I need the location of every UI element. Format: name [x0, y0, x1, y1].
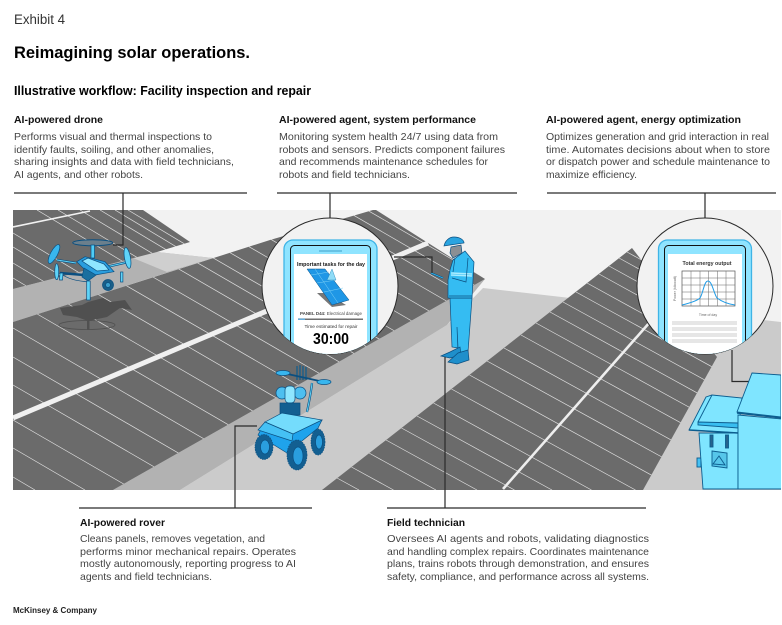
line chart: energy output: Power (kilowatt) [673, 276, 677, 301]
text block: system performance agent: AI-powered agent, system performance [279, 115, 476, 126]
zoom callout: energy output tablet [637, 218, 773, 358]
text block: AI-powered rover: AI-powered rover [80, 518, 165, 529]
illustration: drone [46, 240, 132, 300]
solar panel image [317, 293, 346, 307]
subtitle: Illustrative workflow: Facility inspection and repair [14, 84, 311, 98]
text block: AI-powered rover: performs minor mechanical repairs. Operates [80, 547, 296, 558]
text block: AI-powered rover: Cleans panels, removes vegetation, and [80, 534, 265, 545]
zoom callout: energy output tablet: Total energy output [682, 261, 732, 267]
text block: energy optimization agent: Optimizes generation and grid interaction in real [546, 132, 769, 143]
zoom callout: task tablet: Important tasks for the day [297, 262, 366, 268]
zoom callout: task tablet: Time estimated for repair [304, 324, 358, 329]
line chart: energy output [673, 271, 735, 317]
connector: drone [14, 193, 247, 245]
ground: shaded path edge [113, 279, 485, 490]
title: Reimagining solar operations. [14, 44, 250, 62]
text block: AI-powered drone: AI agents, and other robots. [14, 170, 143, 181]
text block: energy optimization agent: maximize efficiency. [546, 170, 637, 181]
ground: light path [180, 288, 781, 490]
connector: circle to cabinets [732, 350, 752, 382]
exhibit label: Exhibit 4 [14, 12, 65, 27]
text block: system performance agent: robots and sensors. Predicts component failures [279, 145, 505, 156]
text block: AI-powered rover: agents and field technicians. [80, 572, 212, 583]
connector: system performance [277, 193, 517, 218]
text block: system performance agent [279, 115, 505, 181]
text block: field technician: and handling complex repairs. Coordinates maintenance [387, 547, 649, 558]
text block: field technician: plans, trains robots through demonstration, and ensures [387, 559, 649, 570]
text block: energy optimization agent [546, 115, 770, 181]
connector: circle to technician tablet [394, 257, 432, 273]
text block: field technician: safety, compliance, and performance across all systems. [387, 572, 649, 583]
text block: AI-powered drone [14, 115, 234, 181]
text block: AI-powered rover: mostly autonomously, reporting progress to AI [80, 559, 296, 570]
connector: rover [79, 426, 312, 508]
tablet frame [284, 240, 377, 358]
connector: energy optimization [547, 193, 776, 218]
solar panel array: upper left [13, 210, 190, 289]
tablet frame [658, 240, 752, 358]
illustration: field technician [431, 237, 474, 364]
zoom callout: task tablet: PANEL D44: Electrical damage [300, 311, 362, 316]
text block: AI-powered drone: AI-powered drone [14, 115, 103, 126]
text block: field technician: Field technician [387, 518, 465, 529]
placeholder text bars [672, 321, 737, 343]
text block: system performance agent: and recommends maintenance schedules for [279, 157, 489, 168]
text block: energy optimization agent: time. Automates decisions about when to store [546, 145, 770, 156]
text block: AI-powered drone: Performs visual and thermal inspections to [14, 132, 212, 143]
source logo text: McKinsey & Company [13, 605, 97, 615]
ground: upper path [13, 252, 213, 322]
solar panel array: right [322, 248, 717, 490]
connector: technician [387, 357, 646, 508]
zoom callout: task tablet [262, 218, 398, 358]
illustration: solar facility scene [13, 210, 781, 490]
zoom callout: task tablet: 30:00 [313, 331, 349, 348]
line chart: energy output: Time of day [699, 313, 717, 317]
text block: AI-powered rover [80, 518, 296, 583]
drone shadow [59, 298, 132, 330]
text block: AI-powered drone: identify faults, soiling, and other anomalies, [14, 145, 214, 156]
text block: energy optimization agent: or dispatch power and schedule maintenance to [546, 157, 770, 168]
text block: field technician [387, 518, 649, 583]
text block: system performance agent: Monitoring system health 24/7 using data from [279, 132, 498, 143]
illustration: transformer cabinets [689, 373, 782, 489]
text block: AI-powered drone: sharing insights and data with field technicians, [14, 157, 234, 168]
text block: field technician: Oversees AI agents and robots, validating diagnostics [387, 534, 649, 545]
illustration: rover [255, 365, 331, 470]
text block: energy optimization agent: AI-powered agent, energy optimization [546, 115, 741, 126]
tablet screen [294, 254, 367, 357]
tablet screen [668, 254, 742, 357]
text block: system performance agent: robots and field technicians. [279, 170, 410, 181]
solar panel array: centre [13, 210, 485, 490]
